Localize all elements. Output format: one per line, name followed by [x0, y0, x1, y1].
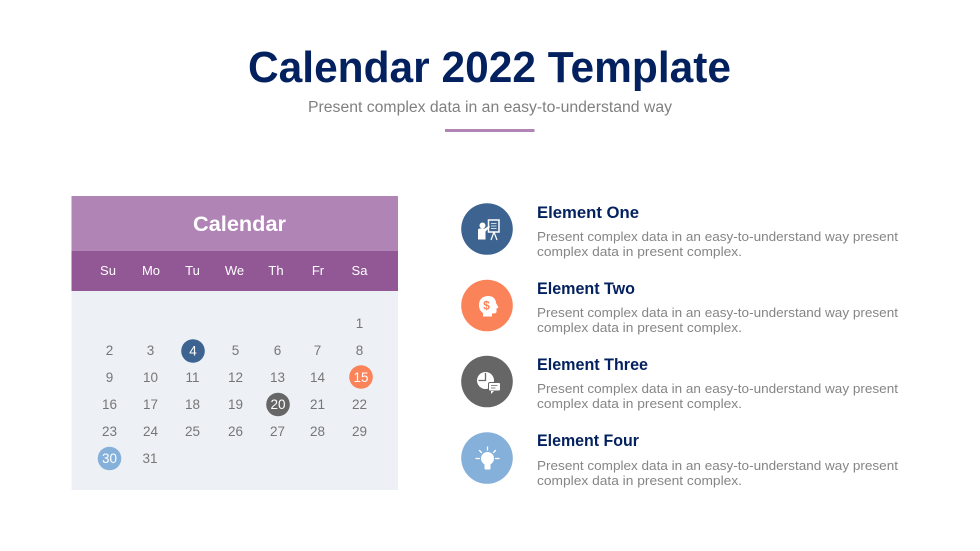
title: Calendar 2022 Template	[248, 43, 731, 92]
element one: complex data in present complex.	[537, 244, 742, 259]
calendar dates: 23	[102, 424, 117, 439]
calendar dates: 28	[310, 424, 325, 439]
element three	[537, 355, 898, 411]
calendar dates: 16	[102, 397, 117, 412]
calendar dates	[102, 316, 367, 466]
weekday row: We	[225, 263, 244, 278]
calendar dates: 12	[228, 370, 243, 385]
calendar dates: 2	[106, 343, 113, 358]
calendar dates: 14	[310, 370, 325, 385]
element two: Present complex data in an easy-to-understand way present	[537, 305, 898, 320]
element one	[537, 203, 898, 259]
calendar dates: 19	[228, 397, 243, 412]
element four	[537, 431, 898, 488]
weekday row: Mo	[142, 263, 160, 278]
highlighted day: 20	[266, 393, 290, 416]
element one: Present complex data in an easy-to-understand way present	[537, 229, 898, 244]
calendar dates: 8	[356, 343, 363, 358]
calendar dates: 29	[352, 424, 367, 439]
calendar header	[72, 196, 398, 252]
weekday row: Sa	[352, 263, 368, 278]
weekday row	[72, 251, 398, 291]
calendar dates: 1	[356, 316, 363, 331]
element four: Present complex data in an easy-to-understand way present	[537, 458, 898, 473]
calendar dates: 31	[142, 451, 158, 466]
calendar dates: 10	[143, 370, 158, 385]
calendar dates: 21	[310, 397, 325, 412]
calendar dates: 18	[185, 397, 200, 412]
weekday row: Su	[100, 263, 116, 278]
element two: complex data in present complex.	[537, 320, 742, 335]
highlighted day: 4	[181, 339, 205, 363]
highlighted day: 15	[349, 365, 373, 389]
icon: head with dollar sign	[461, 280, 513, 331]
calendar dates: 24	[143, 424, 158, 439]
calendar dates: 22	[352, 397, 367, 412]
highlighted day: 20: 20	[270, 397, 286, 412]
icon: clock with speech bubble	[461, 356, 513, 407]
calendar dates: 7	[314, 343, 321, 358]
element four: complex data in present complex.	[537, 473, 742, 488]
calendar dates: 26	[228, 424, 243, 439]
weekday row: Th	[268, 263, 284, 278]
element two: Element Two	[537, 279, 635, 298]
calendar dates: 3	[147, 343, 154, 358]
icon: light bulb	[461, 432, 513, 484]
weekday row: Tu	[185, 263, 200, 278]
weekday row: Fr	[312, 263, 325, 278]
calendar dates: 25	[185, 424, 200, 439]
element two	[537, 279, 898, 335]
element three: Present complex data in an easy-to-understand way present	[537, 381, 898, 396]
icon: head with dollar sign: $	[483, 298, 490, 312]
calendar dates: 11	[185, 370, 200, 385]
calendar dates: 6	[274, 343, 281, 358]
subtitle: Present complex data in an easy-to-understand way	[308, 99, 672, 116]
element four: Element Four	[537, 431, 639, 450]
calendar body	[72, 291, 398, 490]
calendar dates: 27	[270, 424, 285, 439]
calendar heading: Calendar	[193, 213, 286, 236]
element three: Element Three	[537, 355, 648, 374]
highlighted day: 15: 15	[353, 370, 369, 385]
icon: presenter at board	[461, 203, 513, 255]
title accent line	[445, 129, 534, 132]
calendar dates: 17	[143, 397, 158, 412]
element one: Element One	[537, 203, 639, 222]
calendar dates: 9	[106, 370, 113, 385]
highlighted day: 30	[98, 447, 121, 470]
panel: calendar	[72, 196, 398, 490]
highlighted day: 30: 30	[102, 451, 117, 466]
calendar dates: 13	[270, 370, 285, 385]
element three: complex data in present complex.	[537, 396, 742, 411]
highlighted day: 4: 4	[189, 344, 197, 358]
calendar dates: 5	[232, 343, 239, 358]
